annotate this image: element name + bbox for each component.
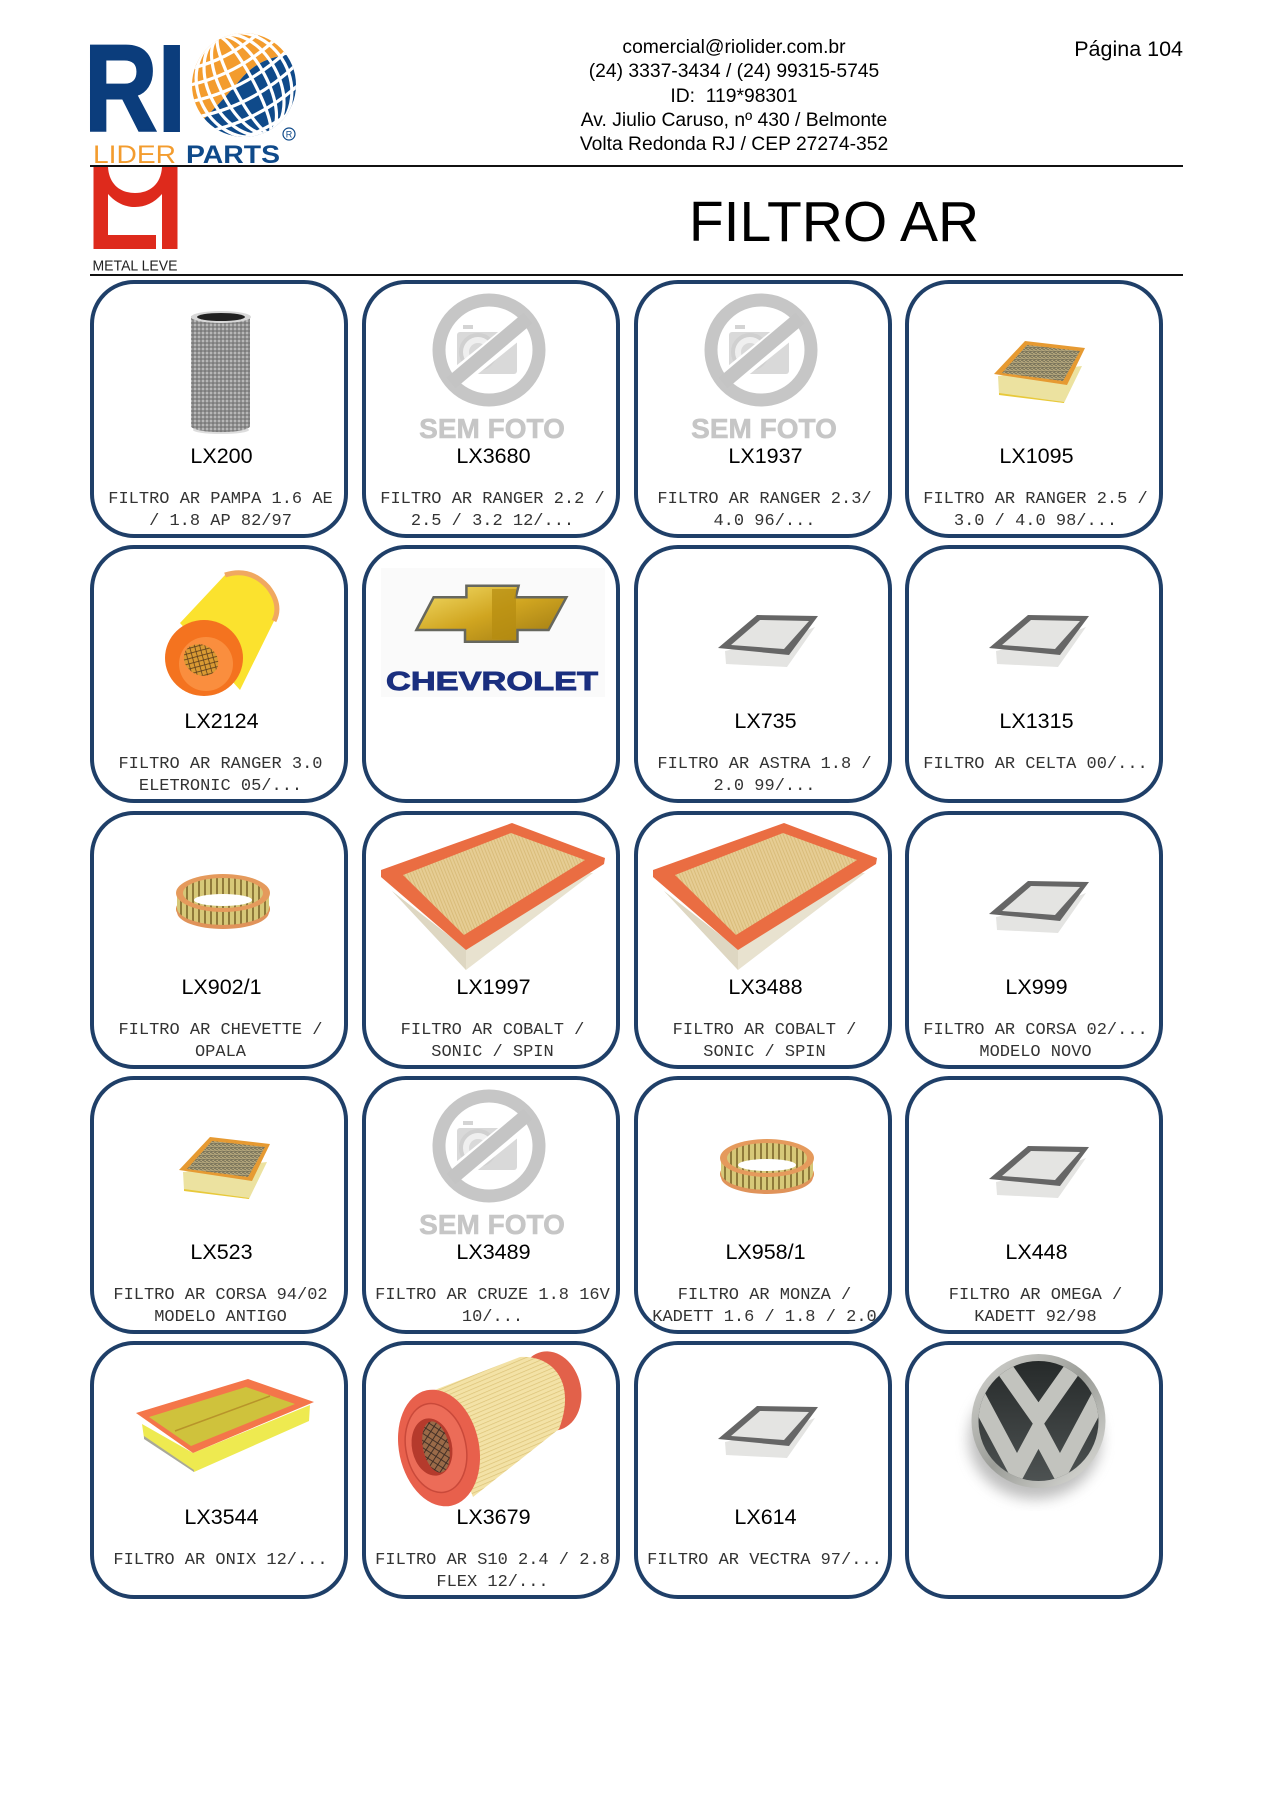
card: LX1997 — [362, 811, 620, 1069]
description — [401, 1021, 584, 1062]
logo: Rio Lider Parts: R — [286, 130, 293, 140]
description: FILTRO AR RANGER 2.2 / — [380, 490, 605, 509]
description: 2.5 / 3.2 12/... — [411, 512, 574, 531]
contact information: Volta Redonda RJ / CEP 27274-352 — [580, 134, 888, 155]
image: grey panel filter — [989, 615, 1089, 667]
description: FILTRO AR CHEVETTE / — [118, 1021, 323, 1040]
description — [380, 490, 605, 531]
image: large orange panel filter — [653, 823, 877, 970]
page number: Página 104 — [1074, 37, 1183, 61]
part number: LX614 — [734, 1505, 797, 1529]
image: no photo placeholder — [419, 1090, 565, 1240]
description: MODELO NOVO — [979, 1043, 1092, 1062]
description: FILTRO AR VECTRA 97/... — [647, 1551, 882, 1570]
description: FILTRO AR CELTA 00/... — [923, 755, 1148, 774]
image: grey panel filter — [718, 1406, 818, 1458]
logo: Rio Lider Parts — [84, 21, 296, 166]
part number: LX735 — [734, 709, 797, 733]
card: LX3680 — [362, 280, 620, 538]
description — [375, 1551, 610, 1592]
logo: Chevrolet — [386, 584, 598, 696]
card: LX3679 — [362, 1341, 620, 1599]
card: LX3544 — [90, 1341, 348, 1599]
image: large cylindrical filter — [398, 1351, 582, 1506]
part number: LX200 — [190, 444, 253, 468]
card: LX3489 — [362, 1076, 620, 1334]
description: 3.0 / 4.0 98/... — [954, 512, 1117, 531]
description — [113, 1286, 328, 1327]
part number: LX1095 — [999, 444, 1074, 468]
contact information: comercial@riolider.com.br — [622, 37, 846, 58]
description: FILTRO AR CORSA 94/02 — [113, 1286, 328, 1305]
description: FILTRO AR RANGER 2.5 / — [923, 490, 1148, 509]
part number: LX1997 — [456, 975, 531, 999]
description: FILTRO AR ONIX 12/... — [113, 1551, 328, 1570]
card: Chevrolet brand — [362, 545, 620, 803]
image: no photo placeholder — [691, 294, 837, 444]
part number: LX3544 — [184, 1505, 259, 1529]
description: 2.0 99/... — [713, 777, 816, 796]
contact information: (24) 3337-3434 / (24) 99315-5745 — [589, 61, 879, 82]
description — [657, 490, 872, 531]
logo: Metal Leve — [92, 167, 178, 274]
description: FILTRO AR OMEGA / — [949, 1286, 1122, 1305]
card: LX1315 — [905, 545, 1163, 803]
title: FILTRO AR — [689, 190, 979, 254]
description: FILTRO AR RANGER 3.0 — [118, 755, 323, 774]
part number: LX1315 — [999, 709, 1074, 733]
part number: LX2124 — [184, 709, 259, 733]
card: LX2124 — [90, 545, 348, 803]
image: no photo placeholder: SEM FOTO — [691, 413, 837, 444]
card: LX1937 — [634, 280, 892, 538]
card: LX523 — [90, 1076, 348, 1334]
image: grey panel filter — [989, 1146, 1089, 1198]
card: LX735 — [634, 545, 892, 803]
description: 10/... — [462, 1308, 523, 1327]
description: MODELO ANTIGO — [154, 1308, 287, 1327]
description: FLEX 12/... — [436, 1573, 549, 1592]
image: orange panel filter — [994, 341, 1085, 403]
part number: LX3488 — [728, 975, 803, 999]
image: large orange panel filter — [381, 823, 605, 970]
description — [657, 755, 872, 796]
logo: Metal Leve: METAL LEVE — [92, 258, 178, 274]
image: grey panel filter — [718, 615, 818, 667]
contact information: ID: 119*98301 — [670, 86, 798, 107]
description: FILTRO AR RANGER 2.3/ — [657, 490, 872, 509]
card: LX902/1 — [90, 811, 348, 1069]
description — [108, 490, 333, 531]
description — [949, 1286, 1122, 1327]
part number: LX958/1 — [725, 1240, 806, 1264]
part number: LX3680 — [456, 444, 531, 468]
card: LX3488 — [634, 811, 892, 1069]
logo: Volkswagen — [962, 1354, 1108, 1506]
description — [923, 490, 1148, 531]
description — [923, 1021, 1148, 1062]
card: LX448 — [905, 1076, 1163, 1334]
card: LX958/1 — [634, 1076, 892, 1334]
part number: LX523 — [190, 1240, 253, 1264]
description: FILTRO AR CORSA 02/... — [923, 1021, 1148, 1040]
image: orange panel filter — [179, 1137, 270, 1199]
part number: LX1937 — [728, 444, 803, 468]
description — [118, 755, 323, 796]
description: SONIC / SPIN — [431, 1043, 554, 1062]
image: ring filter — [720, 1139, 814, 1194]
description — [673, 1021, 856, 1062]
description: FILTRO AR COBALT / — [401, 1021, 584, 1040]
card: LX999 — [905, 811, 1163, 1069]
part number: LX902/1 — [181, 975, 262, 999]
contact information: Av. Jiulio Caruso, nº 430 / Belmonte — [581, 110, 887, 131]
description: FILTRO AR PAMPA 1.6 AE — [108, 490, 333, 509]
description: ELETRONIC 05/... — [139, 777, 302, 796]
image: grey panel filter — [989, 881, 1089, 933]
description: FILTRO AR MONZA / — [678, 1286, 851, 1305]
description: KADETT 1.6 / 1.8 / 2.0 — [652, 1308, 877, 1327]
image: yellow cylindrical filter — [165, 570, 280, 696]
part number: LX3679 — [456, 1505, 531, 1529]
image: no photo placeholder — [419, 294, 565, 444]
card: Volkswagen brand — [905, 1341, 1163, 1599]
description: FILTRO AR CRUZE 1.8 16V — [375, 1286, 610, 1305]
image: yellow panel filter — [136, 1379, 314, 1472]
image: ring filter — [176, 874, 270, 929]
description: FILTRO AR COBALT / — [673, 1021, 856, 1040]
image: no photo placeholder: SEM FOTO — [419, 1209, 565, 1240]
image: no photo placeholder: SEM FOTO — [419, 413, 565, 444]
card: LX200 — [90, 280, 348, 538]
description — [652, 1286, 877, 1327]
card: LX614 — [634, 1341, 892, 1599]
image: cylindrical mesh filter — [191, 311, 251, 434]
description: 4.0 96/... — [713, 512, 816, 531]
description: FILTRO AR ASTRA 1.8 / — [657, 755, 872, 774]
description: / 1.8 AP 82/97 — [149, 512, 292, 531]
part number: LX3489 — [456, 1240, 531, 1264]
description: KADETT 92/98 — [974, 1308, 1097, 1327]
contact information — [580, 37, 888, 155]
description — [375, 1286, 610, 1327]
part number: LX999 — [1005, 975, 1068, 999]
description: SONIC / SPIN — [703, 1043, 826, 1062]
card: LX1095 — [905, 280, 1163, 538]
logo: Rio Lider Parts: RI — [84, 21, 186, 158]
description: FILTRO AR S10 2.4 / 2.8 — [375, 1551, 610, 1570]
description: OPALA — [195, 1043, 246, 1062]
description — [118, 1021, 323, 1062]
part number: LX448 — [1005, 1240, 1068, 1264]
logo: Chevrolet: CHEVROLET — [386, 666, 598, 696]
